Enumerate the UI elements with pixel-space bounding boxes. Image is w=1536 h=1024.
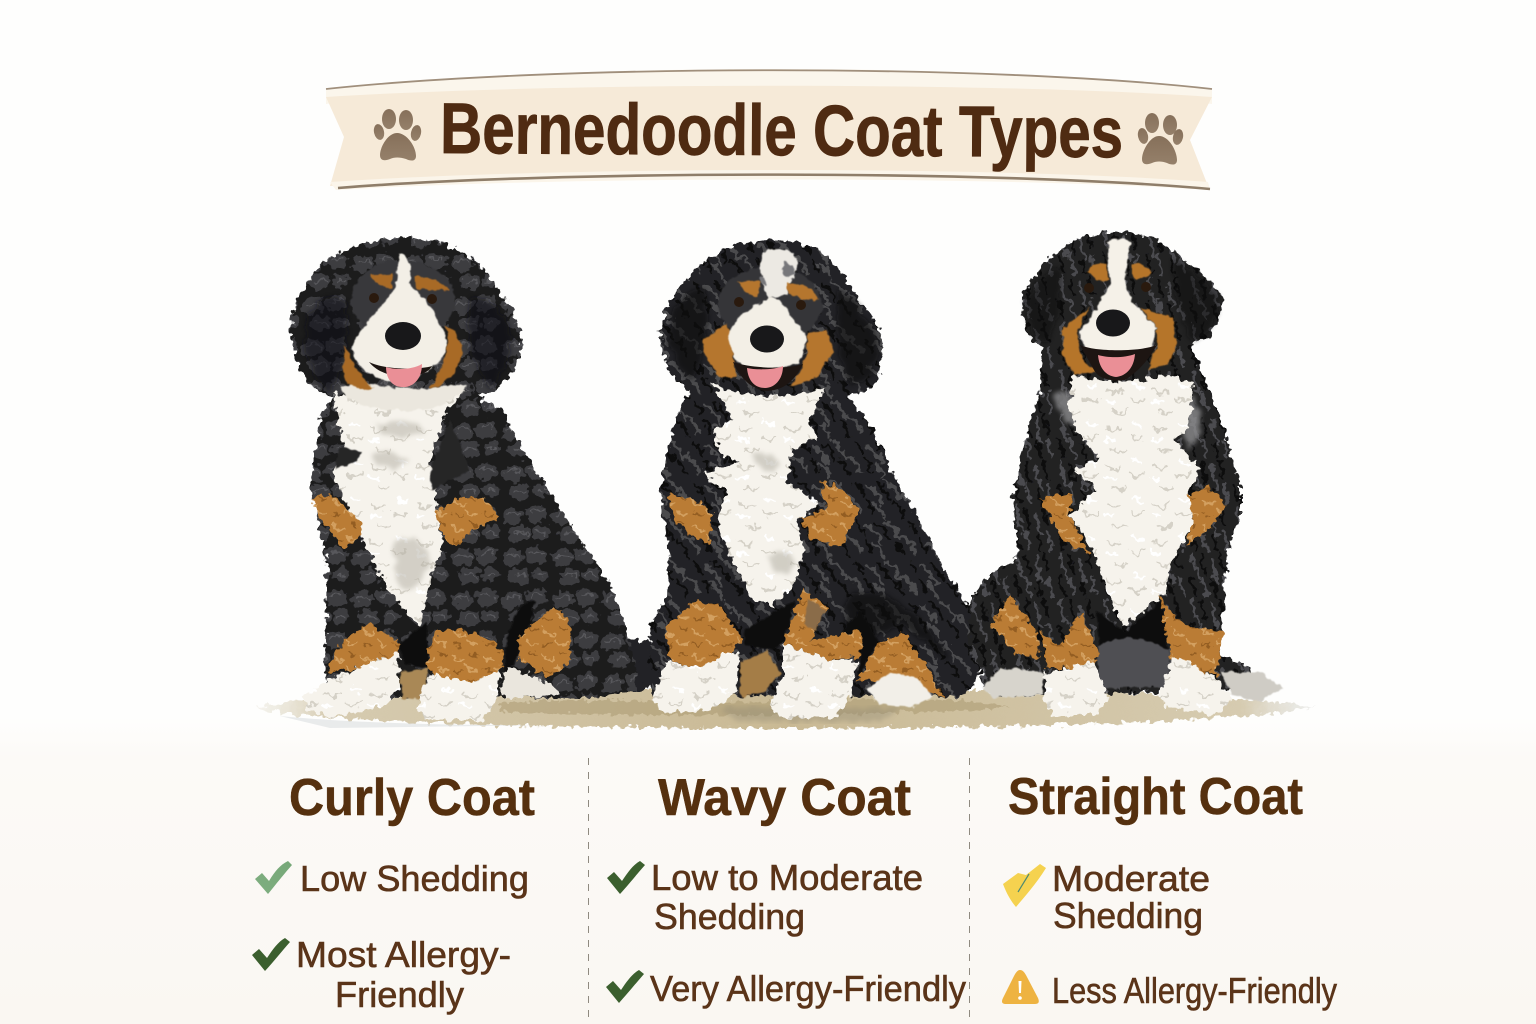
- ear shading: [1026, 262, 1218, 345]
- tan cheeks and brows: [1063, 263, 1177, 374]
- muzzle: [723, 296, 807, 372]
- panel: wavy coat: [606, 769, 966, 1009]
- neck ruff: [340, 384, 468, 410]
- body silhouette: [970, 232, 1250, 696]
- icon: yellow check: [1003, 864, 1046, 907]
- eyes: [734, 297, 806, 310]
- tan cheeks and brows: [343, 273, 462, 390]
- moderate shedding text: Moderate: [1052, 858, 1210, 899]
- mid tan behind paws: [400, 668, 428, 700]
- allergy text: [296, 934, 511, 1015]
- paws: [982, 668, 1043, 698]
- eyes: [369, 293, 437, 304]
- muzzle and blaze: [1080, 239, 1157, 358]
- panel: curly coat: [252, 769, 535, 1015]
- tan chest patches: [667, 493, 712, 543]
- chest shading: [752, 454, 795, 575]
- dashed divider: [968, 758, 970, 1024]
- face dark mask: [351, 260, 455, 340]
- tan leg patches: [327, 623, 400, 673]
- moderate shedding text: [1052, 858, 1210, 936]
- icon: dark check: [607, 861, 645, 894]
- white forehead: [760, 249, 798, 298]
- grey belly fur: [1098, 638, 1172, 688]
- paws: [303, 653, 400, 717]
- icon: warning triangle: [1002, 970, 1039, 1004]
- mouth and tongue: [369, 362, 432, 377]
- tail: [638, 640, 657, 690]
- ear shading: [670, 289, 950, 660]
- nose: [1096, 310, 1130, 336]
- moderate shedding text: Shedding: [1053, 895, 1203, 936]
- mouth and tongue: [733, 362, 803, 391]
- icon: light check: [255, 861, 292, 894]
- allergy text: Very Allergy-Friendly: [650, 968, 966, 1009]
- belly: [1096, 600, 1168, 655]
- heading: Curly Coat: [289, 769, 535, 827]
- panel: straight coat: [1002, 768, 1337, 1011]
- forehead spots: [760, 262, 795, 285]
- muzzle and blaze: [353, 254, 447, 382]
- shadow between legs: [398, 600, 535, 690]
- white chest: [1070, 375, 1200, 628]
- allergy text: Most Allergy-: [296, 934, 511, 975]
- body silhouette: [649, 240, 983, 697]
- paws: [652, 653, 740, 713]
- nose: [750, 326, 784, 352]
- tan chest patches: [1040, 495, 1090, 555]
- shedding text: Low to Moderate: [651, 857, 923, 898]
- tail: [626, 640, 652, 691]
- tan cheeks and brows: [703, 280, 833, 387]
- dog: straight coat: [970, 232, 1283, 715]
- chest shading: [370, 422, 430, 589]
- title text: Bernedoodle Coat Types: [440, 89, 1123, 173]
- low shedding text: Low Shedding: [300, 858, 529, 899]
- white chest: [333, 390, 467, 627]
- ground: [254, 689, 1316, 728]
- icon: left paw: [372, 109, 423, 161]
- allergy text: Friendly: [335, 974, 464, 1015]
- ear shading: [304, 296, 511, 392]
- black chest notches: [335, 420, 470, 490]
- mouth and tongue: [1080, 345, 1157, 381]
- tan chest patches: [312, 495, 362, 547]
- dog: curly coat: [290, 238, 652, 720]
- shedding text: Shedding: [654, 896, 805, 937]
- heading: Straight Coat: [1008, 768, 1303, 826]
- allergy text: Less Allergy-Friendly: [1052, 970, 1337, 1011]
- heading: Wavy Coat: [658, 769, 911, 827]
- body silhouette: [290, 238, 636, 698]
- icon: dark check: [252, 938, 290, 971]
- eyes: [1084, 282, 1151, 293]
- tan leg patches: [990, 595, 1040, 658]
- title banner: [326, 69, 1212, 190]
- icon: dark check: [606, 970, 644, 1003]
- icon: right paw: [1136, 113, 1185, 165]
- nose: [385, 322, 421, 350]
- shedding text: [651, 857, 923, 937]
- face dark mask: [718, 267, 822, 343]
- shadow between legs: [745, 600, 878, 680]
- dog: wavy coat: [638, 240, 983, 718]
- white chest: [703, 383, 825, 607]
- grey chest fringe: [1055, 392, 1201, 450]
- tan leg patches: [665, 600, 743, 667]
- dashed divider: [588, 758, 590, 1024]
